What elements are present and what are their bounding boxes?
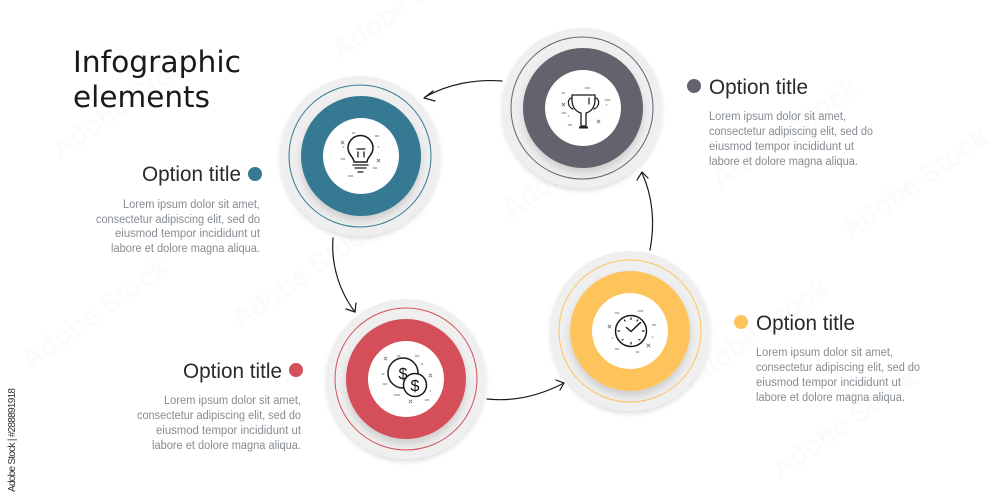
text: Adobe Stock: [46, 41, 204, 165]
panel: teal option text: Lorem ipsum dolor sit amet,: [123, 199, 260, 211]
panel: teal option text: Option title: [142, 163, 241, 186]
title: elements: [73, 80, 210, 114]
text: Adobe Stock: [16, 251, 174, 375]
icon: light bulb: [341, 133, 380, 176]
panel: gray option text: consectetur adipiscing elit, sed do: [709, 126, 873, 138]
text: Adobe Stock: [706, 71, 864, 195]
icon: coins: [382, 356, 432, 403]
panel: yellow option text: [734, 312, 920, 404]
panel: gray option text: [687, 76, 873, 168]
gray dot: [687, 79, 701, 93]
panel: red circle: [326, 299, 486, 459]
panel: yellow option text: consectetur adipiscing elit, sed do: [756, 362, 920, 374]
stock id vertical text: Adobe Stock | #288891918: [7, 388, 18, 492]
panel: teal option text: labore et dolore magna aliqua.: [111, 243, 260, 255]
panel: red option text: Option title: [183, 360, 282, 383]
arrow: teal to red: [333, 238, 356, 312]
panel: yellow option text: eiusmod tempor incididunt ut: [756, 377, 902, 389]
panel: red option text: labore et dolore magna aliqua.: [152, 440, 301, 452]
arrow: gray to teal: [424, 81, 502, 101]
icon: coins: $: [411, 378, 420, 395]
text: Adobe Stock: [676, 271, 834, 395]
panel: red option text: Lorem ipsum dolor sit amet,: [164, 395, 301, 407]
text: Adobe Stock: [226, 211, 384, 335]
teal dot: [248, 167, 262, 181]
panel: yellow option text: Lorem ipsum dolor sit amet,: [756, 347, 893, 359]
panel: gray option text: Option title: [709, 76, 808, 99]
panel: gray option text: eiusmod tempor incididunt ut: [709, 141, 855, 153]
panel: teal option text: [96, 163, 262, 255]
panel: red option text: eiusmod tempor incididunt ut: [156, 425, 302, 437]
panel: gray option text: Lorem ipsum dolor sit amet,: [709, 111, 846, 123]
panel: teal circle: [280, 76, 440, 236]
text: Adobe Stock: [496, 101, 654, 225]
panel: gray circle: [502, 28, 662, 188]
title: Infographic: [73, 45, 241, 79]
panel: yellow option text: labore et dolore magna aliqua.: [756, 392, 905, 404]
yellow dot: [734, 315, 748, 329]
text: Adobe Stock: [836, 121, 994, 245]
red dot: [289, 363, 303, 377]
panel: red option text: [137, 360, 303, 452]
title: [73, 45, 241, 114]
panel: yellow option text: Option title: [756, 312, 855, 335]
icon: coins: $: [399, 366, 408, 383]
panel: yellow circle: [550, 251, 710, 411]
arrow: red to yellow: [487, 380, 564, 400]
arrow: yellow to gray: [637, 172, 653, 250]
icon: trophy: [562, 88, 610, 128]
panel: teal option text: consectetur adipiscing elit, sed do: [96, 214, 260, 226]
panel: teal option text: eiusmod tempor incididunt ut: [115, 228, 261, 240]
text: Adobe Stock: [766, 361, 924, 485]
panel: gray option text: labore et dolore magna aliqua.: [709, 156, 858, 168]
icon: clock: [608, 311, 656, 352]
panel: red option text: consectetur adipiscing elit, sed do: [137, 410, 301, 422]
